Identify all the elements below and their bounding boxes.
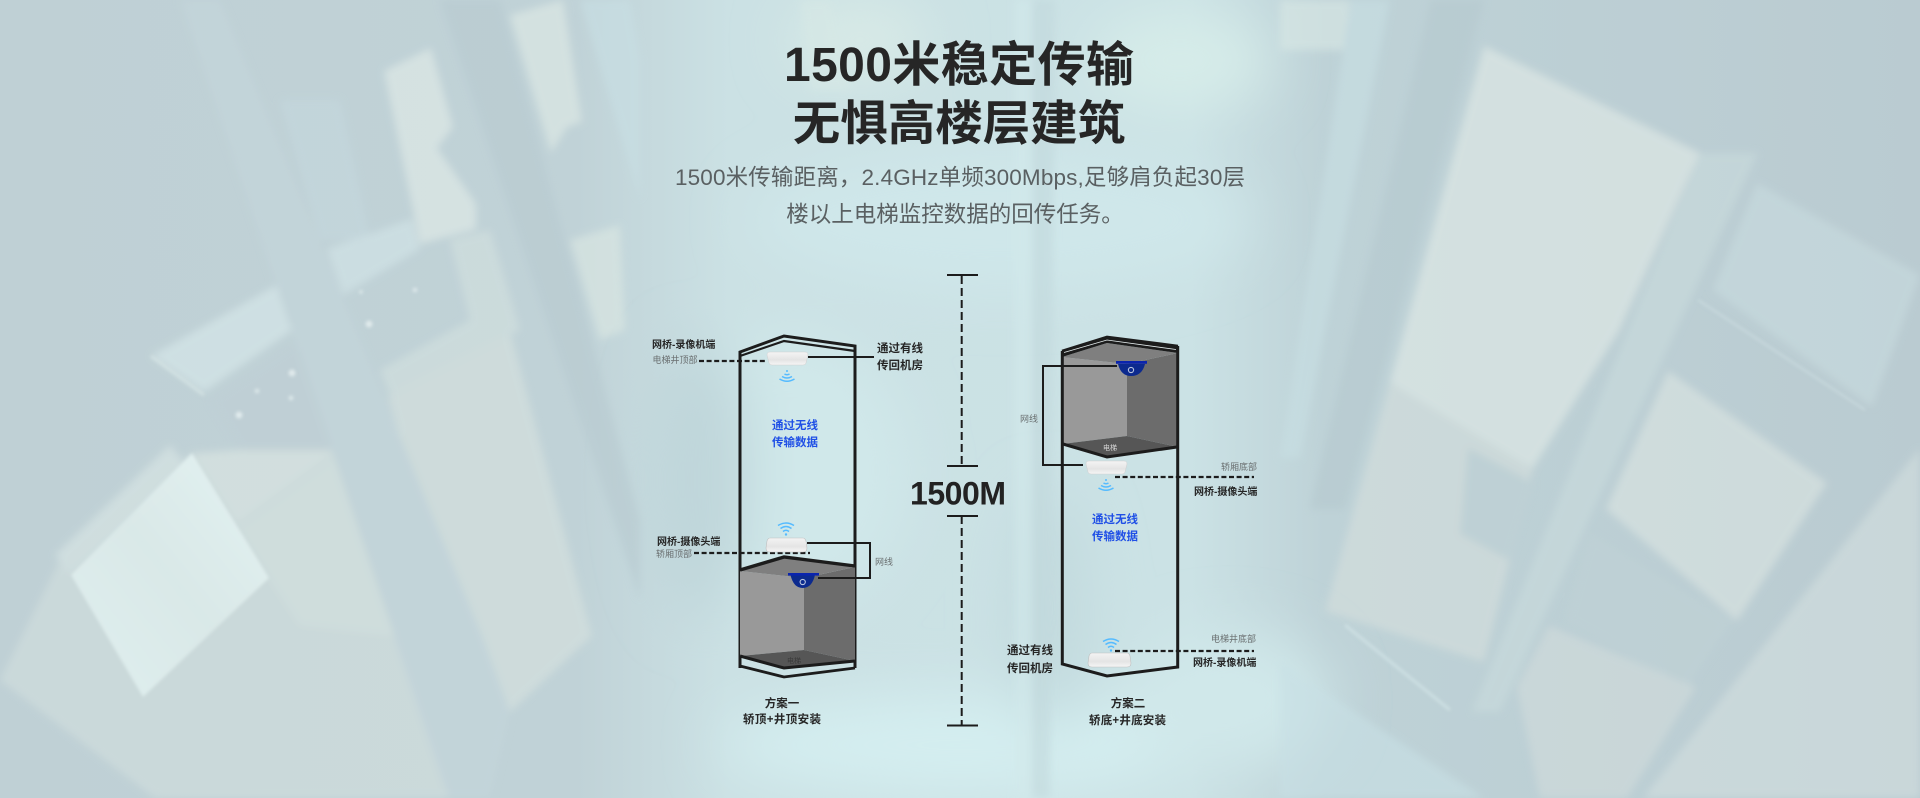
distance ruler: 1500M: 1500M: [910, 476, 1006, 512]
labels: 轿厢顶部: [656, 548, 692, 559]
labels: 通过有线: [877, 341, 923, 355]
labels: 轿底+井底安装: [1089, 713, 1166, 727]
labels: [652, 338, 923, 726]
title: 无惧高楼层建筑: [793, 98, 1125, 151]
labels: 轿顶+井顶安装: [743, 712, 822, 726]
dashed leaders: [694, 361, 810, 553]
labels: 通过无线: [1092, 512, 1138, 526]
icon: dome camera: [1116, 361, 1147, 376]
labels: 方案二: [1111, 696, 1145, 710]
labels: 电梯井底部: [1211, 633, 1256, 644]
labels: 网桥-摄像头端: [657, 535, 720, 548]
labels: 网桥-录像机端: [1193, 656, 1256, 669]
labels: [1007, 413, 1257, 727]
labels: 传回机房: [1007, 661, 1053, 675]
labels: 方案一: [765, 696, 800, 710]
right side: [1280, 0, 1350, 50]
subtitle: [675, 165, 1245, 227]
elevator car: [1062, 343, 1178, 457]
subtitle: 1500米传输距离，2.4GHz单频300Mbps,足够肩负起30层: [675, 165, 1245, 190]
uplink wire: [808, 356, 874, 358]
shaft outline: [740, 336, 855, 668]
network cable: [1043, 366, 1117, 465]
elevator car: 电梯: [1103, 443, 1117, 452]
subtitle: 楼以上电梯监控数据的回传任务。: [786, 202, 1124, 227]
labels: 电梯井顶部: [652, 354, 698, 365]
labels: 轿厢底部: [1221, 461, 1257, 472]
scheme one: elevator shaft diagram: [652, 336, 923, 726]
icon: wifi signal down: [1098, 479, 1114, 490]
icon: wifi signal down: [780, 370, 794, 381]
elevator car: [740, 557, 855, 677]
labels: 网线: [875, 556, 893, 567]
icon: dome camera: [788, 573, 819, 588]
title: [784, 39, 1134, 151]
icon: wifi signal up: [778, 523, 794, 536]
icon: upper bridge: [1086, 461, 1127, 474]
icon: top bridge: [767, 352, 808, 365]
labels: 传输数据: [1092, 529, 1138, 543]
shaft outline: [1062, 337, 1178, 676]
icon: wifi signal up: [1103, 639, 1119, 652]
icon: lower bridge: [766, 538, 807, 552]
labels: 网桥-摄像头端: [1194, 485, 1257, 498]
title: 1500米稳定传输: [784, 39, 1134, 92]
labels: 传回机房: [877, 358, 923, 372]
dashed leaders: [1115, 477, 1254, 651]
centre: [800, 0, 850, 90]
labels: 通过有线: [1007, 643, 1053, 657]
network cable: [807, 543, 870, 578]
labels: 网桥-录像机端: [652, 338, 715, 351]
elevator car: 电梯: [787, 656, 801, 665]
scheme two: elevator shaft diagram: [1007, 337, 1257, 727]
bright floor and highlights: [71, 288, 1865, 710]
left side: [0, 443, 490, 798]
icon: lower bridge: [1088, 653, 1131, 667]
labels: 网线: [1020, 413, 1038, 424]
labels: 传输数据: [772, 435, 818, 449]
labels: 通过无线: [772, 418, 818, 432]
